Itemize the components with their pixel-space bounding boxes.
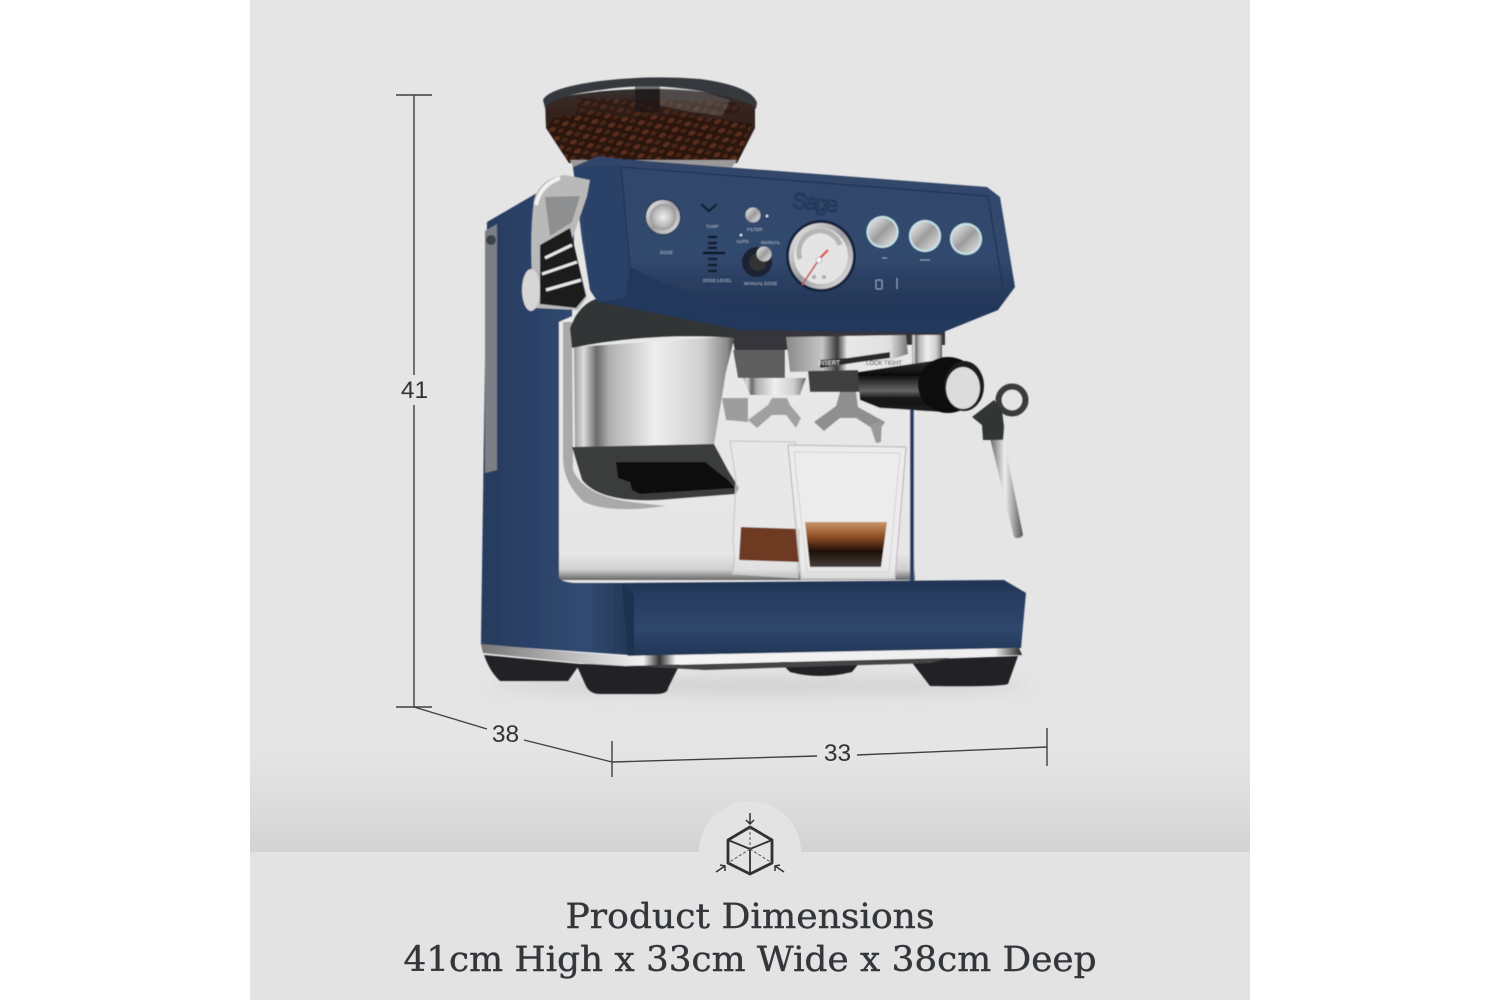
floor shadow	[490, 679, 1030, 693]
cradle dark foot	[572, 444, 739, 500]
steam tube	[858, 359, 945, 412]
recess upper shadow	[730, 325, 945, 352]
group head text: INSERT	[818, 361, 840, 367]
dark cradle collar	[570, 298, 744, 348]
dimension: width 33	[612, 728, 1047, 767]
bean hopper	[543, 77, 757, 172]
hopper collar	[570, 160, 737, 172]
panel labels: MANUAL DOSE	[744, 281, 777, 286]
steam wand ring	[998, 386, 1026, 414]
dimension: width 33: 33	[824, 740, 851, 767]
panel labels	[660, 224, 781, 286]
grind switch	[522, 269, 540, 311]
recess back plate	[555, 320, 915, 580]
caption band	[250, 852, 1250, 1000]
icon: dimensions cube	[699, 801, 801, 874]
water tank window	[485, 224, 497, 473]
base tray	[622, 580, 1026, 660]
head side shading	[573, 165, 630, 302]
grind size dial	[645, 199, 681, 235]
coffee beans	[548, 114, 752, 163]
drip tray shadow	[632, 658, 950, 670]
right portafilter	[808, 370, 885, 432]
glass left	[730, 441, 800, 578]
group head collar	[786, 335, 908, 372]
steam wand pipe	[990, 436, 1023, 538]
filter button	[746, 208, 760, 222]
panel labels: FILTER	[747, 227, 763, 232]
panel labels: DOSE	[660, 250, 673, 255]
hopper bowl	[545, 89, 755, 163]
chrome strip	[481, 644, 1022, 666]
dimension: height 41: 41	[401, 377, 428, 404]
left portafilter	[733, 350, 806, 428]
pressure gauge	[786, 220, 856, 292]
front panel outline	[621, 167, 1003, 288]
base front corner	[622, 583, 634, 660]
thin blue post	[910, 410, 914, 582]
text: measurements: 41cm High x 33cm Wide x 38cm Deep	[404, 940, 1096, 980]
manual dial	[742, 246, 772, 277]
body column	[481, 193, 630, 655]
backplate reflection	[722, 398, 748, 422]
product: espresso machine: LOCK TIGHT	[866, 361, 902, 367]
grinder dose spout	[531, 175, 590, 310]
steam knob cap	[944, 361, 984, 411]
heading: product dimensions: Product Dimensions	[566, 897, 934, 937]
panel labels: TAMP	[706, 224, 718, 229]
steam wand joint	[972, 400, 1004, 440]
hopper lid	[543, 77, 757, 109]
product: espresso machine	[481, 77, 1026, 694]
indicator lights	[740, 215, 768, 236]
dose level bars	[703, 237, 725, 271]
logo: Sage	[791, 188, 839, 217]
machine feet	[484, 655, 1018, 694]
espresso drip	[870, 420, 882, 443]
tamp chevron	[701, 204, 717, 211]
dimension: depth 38: 38	[492, 721, 519, 748]
tank side button	[486, 235, 496, 245]
status icons	[876, 258, 930, 289]
shot buttons	[866, 216, 982, 255]
hopper glass highlight	[660, 88, 730, 116]
dimension: depth 38	[414, 707, 612, 777]
steel bean cradle	[574, 336, 735, 447]
background panel	[250, 0, 1250, 852]
panel labels: MANUAL	[761, 240, 781, 245]
panel labels: AUTO	[736, 239, 749, 244]
panel labels: DOSE LEVEL	[703, 278, 732, 283]
glass right	[788, 445, 906, 579]
cradle side trim	[563, 322, 666, 509]
head unit	[573, 156, 1015, 332]
right chrome pipe	[912, 335, 942, 365]
dimension: height 41	[396, 95, 432, 707]
steam knob body	[918, 357, 978, 413]
